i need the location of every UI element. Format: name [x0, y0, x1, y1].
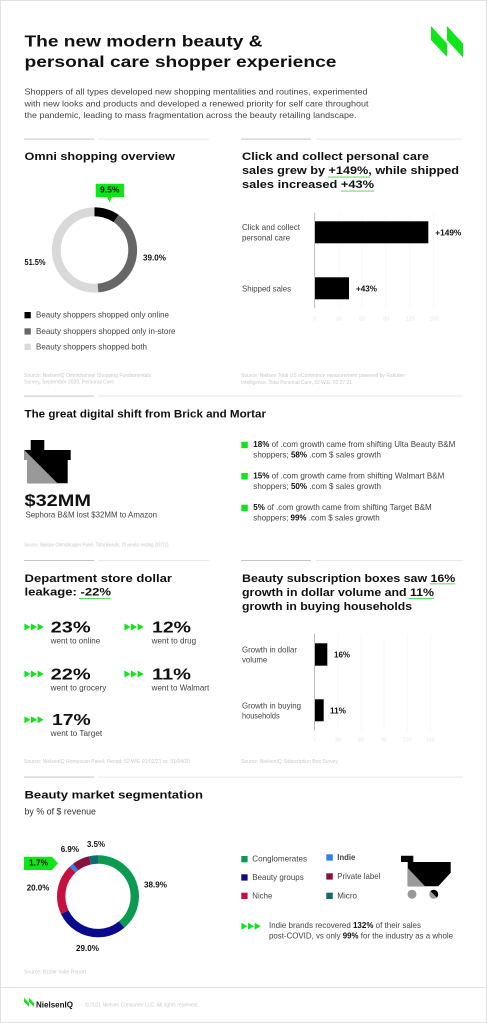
source: omni shopping: Survey, September 2020, Personal Care — [24, 380, 114, 386]
stat: 11% Walmart: went to Walmart — [151, 683, 210, 692]
bar chart: subscription growth — [242, 634, 435, 744]
donut labels: 20.0% — [27, 884, 49, 893]
bar chart: click and collect vs shipped: 120 — [406, 317, 414, 323]
legend: segmentation: Conglomerates — [252, 854, 307, 864]
callout: 1.7% — [24, 857, 58, 870]
source: omni shopping: Source: NielsenIQ Omnichannel Shopping Fundamentals — [24, 373, 151, 379]
heading: department store: Department store dollar — [24, 573, 173, 585]
bar chart: click and collect vs shipped: 30 — [336, 317, 342, 323]
bar chart: subscription growth: households — [242, 711, 280, 721]
bullet list: retailer shifts: shoppers; 50% .com $ sales growth — [253, 481, 381, 491]
intro paragraph: Shoppers of all types developed new shopping mentalities and routines, experimented — [24, 87, 368, 97]
intro paragraph — [23, 87, 369, 120]
title: personal care shopper experience — [24, 54, 337, 71]
donut labels — [27, 840, 167, 953]
callout: 9.5%: 9.5% — [100, 186, 120, 195]
bar chart: click and collect vs shipped: Shipped sales — [242, 284, 291, 294]
stat: $32MM: $32MM — [24, 491, 91, 510]
icon: NielsenIQ green logo mark — [431, 26, 463, 58]
heading: click and collect: Click and collect personal care — [242, 151, 429, 163]
legend: segmentation: Micro — [337, 890, 357, 900]
legend: omni shopping: Beauty shoppers shopped only in-store — [36, 326, 176, 336]
bar chart: subscription growth: volume — [242, 655, 268, 665]
bar chart: click and collect vs shipped: 150 — [429, 317, 438, 323]
label: 39.0%: 39.0% — [143, 254, 166, 263]
legend: omni shopping: Beauty shoppers shopped both — [36, 341, 147, 351]
source: segmentation: Source: Bzzier Indie Report — [24, 970, 87, 976]
bullet list: retailer shifts — [241, 439, 455, 523]
callout: indie brands — [241, 920, 453, 941]
bullet list: retailer shifts: shoppers; 58% .com $ sales growth — [253, 450, 381, 460]
bar chart: click and collect vs shipped: +149% — [435, 229, 461, 238]
donut chart: omni shopping — [56, 212, 133, 288]
heading: department store: leakage: -22% — [24, 587, 111, 599]
source: department store: Source: NielsenIQ Homescan Panel, Period: 52 W/E 01/02/21 vs. 01/04/20 — [24, 759, 190, 765]
bar chart: subscription growth: 60 — [358, 738, 364, 744]
icon: footer logo mark — [24, 998, 34, 1007]
heading: subscription boxes: Beauty subscription boxes saw 16% — [242, 573, 455, 585]
icon: store — [24, 440, 71, 483]
subheading: by revenue: by % of $ revenue — [24, 806, 96, 816]
bar chart: click and collect vs shipped — [242, 213, 461, 323]
legend: omni shopping: Beauty shoppers shopped only online — [36, 310, 169, 320]
panel: department store leakage — [24, 573, 210, 765]
stat: 22% grocery: went to grocery — [50, 683, 106, 692]
bar chart: click and collect vs shipped: Click and collect — [242, 222, 301, 232]
intro paragraph: with new looks and products and developed a renewed priority for self care throughout — [23, 98, 369, 108]
title: The new modern beauty & — [24, 34, 262, 50]
donut labels: 6.9% — [61, 845, 79, 854]
heading: click and collect: sales increased +43% — [242, 179, 374, 191]
legend: segmentation: Beauty groups — [252, 872, 304, 882]
panel: omni shopping overview — [24, 151, 176, 386]
panel: beauty subscription boxes — [241, 573, 455, 765]
legend: segmentation: Private label — [337, 871, 380, 881]
heading: segmentation: Beauty market segmentation — [24, 790, 203, 802]
bar chart: subscription growth: 0 — [313, 738, 316, 744]
stat: 23% online: went to online — [50, 636, 100, 645]
source: click and collect: Intelligence, Total Personal Care, 52 W.E. 03.27.21 — [241, 380, 352, 386]
legend: segmentation: Indie — [337, 852, 356, 862]
stat: 23% online: 23% — [51, 619, 91, 636]
heading: click and collect: sales grew by +149%, while shipped — [242, 165, 459, 177]
text: Sephora: Sephora B&M lost $32MM to Amazon — [26, 509, 157, 519]
panel: beauty market segmentation — [24, 790, 453, 976]
bar chart: click and collect vs shipped: personal care — [242, 233, 290, 243]
stat: 11% Walmart — [124, 666, 210, 692]
panel: click and collect — [241, 151, 461, 386]
bar chart: click and collect vs shipped: 90 — [383, 317, 389, 323]
heading: subscription boxes: growth in dollar volume and 11% — [242, 587, 434, 599]
source: omni shopping — [24, 373, 151, 386]
heading: subscription boxes — [242, 573, 455, 613]
bullet list: retailer shifts: 18% of .com growth came from shifting Ulta Beauty B&M — [253, 439, 455, 449]
bar chart: subscription growth: 16% — [334, 650, 350, 659]
bullet list: retailer shifts: shoppers; 99% .com $ sales growth — [253, 513, 380, 523]
heading: click and collect — [242, 151, 459, 192]
source: click and collect: Source: Nielsen Total US eCommerce measurement powered by Rakuten — [241, 373, 405, 379]
stat: 22% grocery: 22% — [51, 666, 91, 683]
heading: omni shopping: Omni shopping overview — [24, 151, 175, 163]
icon: shopping cart — [401, 856, 451, 899]
heading: subscription boxes: growth in buying households — [242, 601, 412, 613]
stat: 17% Target — [24, 712, 103, 738]
bar chart: click and collect vs shipped: 0 — [313, 317, 316, 323]
callout: indie brands: post-COVID, vs only 99% for the industry as a whole — [269, 931, 453, 941]
heading: department store — [24, 573, 173, 599]
footer brand: NielsenIQ — [36, 1000, 73, 1009]
legend: segmentation: Niche — [252, 890, 273, 900]
bar chart: subscription growth: 120 — [403, 738, 412, 744]
donut labels: 29.0% — [76, 944, 99, 953]
bar chart: subscription growth: 11% — [330, 706, 346, 715]
callout: 1.7%: 1.7% — [29, 859, 48, 868]
footer — [24, 998, 198, 1009]
bar chart: subscription growth: Growth in buying — [242, 700, 301, 710]
bar chart: subscription growth: 30 — [335, 738, 341, 744]
source: digital shift: Source: Nielsen Omnishopper Panel, Total Beauty, 20 weeks ending 2/27/21 — [24, 543, 169, 549]
stat: 17% Target: went to Target — [50, 729, 103, 738]
callout: 9.5% — [96, 184, 124, 202]
bar chart: click and collect vs shipped: 60 — [359, 317, 365, 323]
label: 51.5%: 51.5% — [24, 258, 46, 267]
bar chart: subscription growth: 150 — [426, 738, 435, 744]
title — [24, 34, 337, 71]
donut labels: 3.5% — [87, 840, 105, 849]
stat: 12% drug: went to drug — [151, 636, 196, 645]
copyright: © 2021 Nielsen Consumer LLC. All rights reserved. — [85, 1002, 198, 1009]
donut labels: 38.9% — [144, 880, 167, 889]
source: click and collect — [241, 373, 405, 386]
stat: 12% drug — [124, 619, 196, 645]
bar chart: subscription growth: 90 — [381, 738, 387, 744]
bar chart: subscription growth: Growth in dollar — [242, 644, 297, 654]
source: subscription: Source: NielsenIQ Subscription Box Survey — [241, 759, 338, 765]
bar chart: click and collect vs shipped: +43% — [356, 284, 377, 293]
donut chart: segmentation — [61, 860, 135, 933]
stat: 12% drug: 12% — [152, 619, 191, 636]
stat: 22% grocery — [24, 666, 106, 692]
heading: digital shift: The great digital shift from Brick and Mortar — [24, 409, 267, 421]
callout: indie brands: Indie brands recovered 132% of their sales — [269, 920, 421, 930]
bullet list: retailer shifts: 5% of .com growth came from shifting Target B&M — [253, 502, 432, 512]
stat: 17% Target: 17% — [52, 712, 91, 729]
intro paragraph: the pandemic, leading to mass fragmentation across the beauty retailing landscape. — [24, 110, 356, 120]
panel: digital shift — [24, 409, 455, 549]
legend: segmentation — [241, 852, 380, 900]
bullet list: retailer shifts: 15% of .com growth came from shifting Walmart B&M — [253, 470, 444, 480]
legend: omni shopping — [24, 310, 176, 351]
stat: 23% online — [24, 619, 100, 645]
stat: 11% Walmart: 11% — [152, 666, 191, 683]
